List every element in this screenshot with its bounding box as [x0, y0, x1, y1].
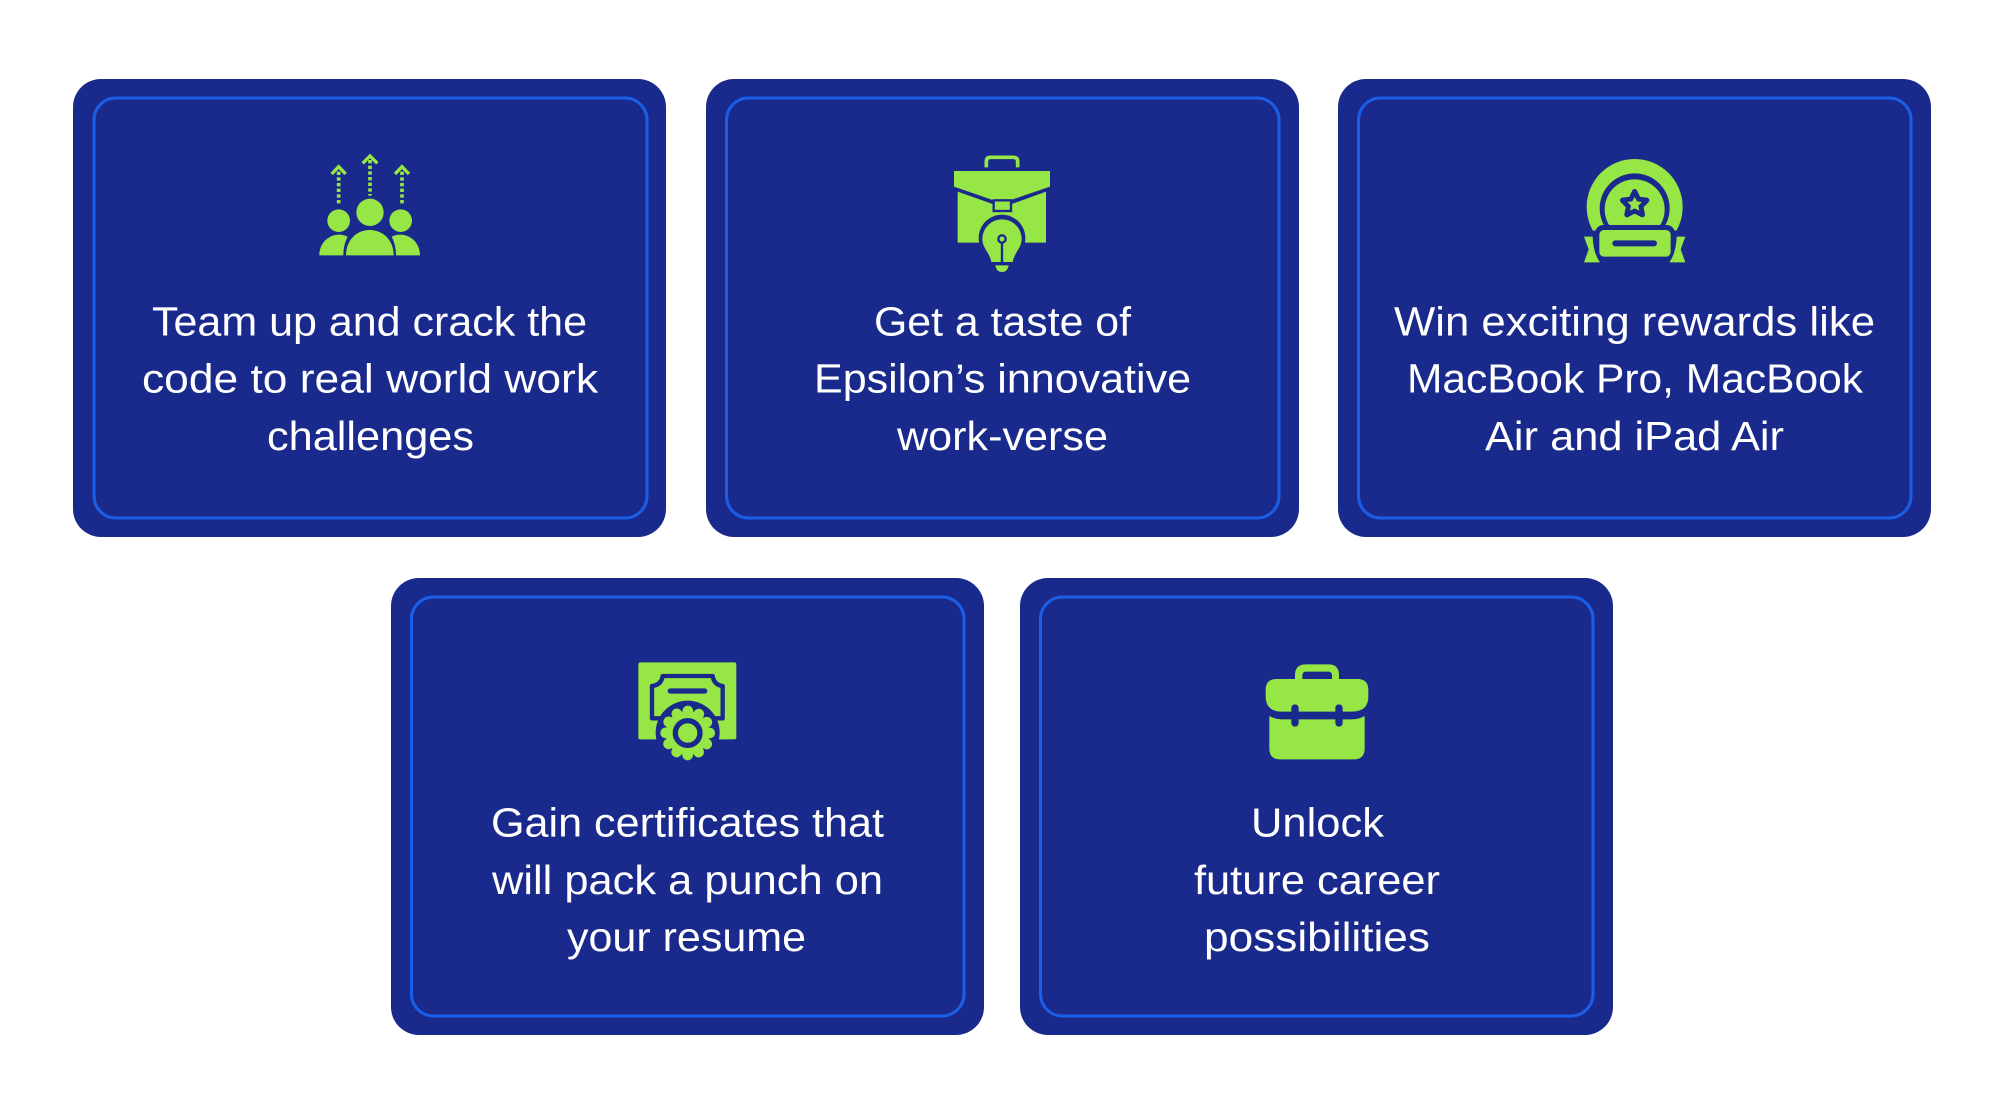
text: certificates: your resume — [567, 914, 806, 960]
icon: award badge — [1584, 159, 1685, 262]
icon: team with arrows — [319, 156, 420, 255]
icon: briefcase with bulb — [954, 157, 1050, 272]
icon: briefcase — [1266, 664, 1368, 759]
text: work-verse: Epsilon’s innovative — [814, 356, 1191, 402]
text: rewards — [1394, 298, 1875, 459]
text: certificates: Gain certificates that — [491, 800, 885, 846]
text: career: future career — [1194, 857, 1440, 903]
text: team up: code to real world work — [142, 356, 599, 402]
icon: certificate with seal — [638, 662, 736, 765]
panel: rewards — [1338, 79, 1931, 537]
text: career: Unlock — [1251, 800, 1385, 846]
text: certificates — [491, 800, 885, 960]
panel: career — [1020, 578, 1613, 1035]
text: rewards: MacBook Pro, MacBook — [1407, 356, 1864, 402]
panel: certificates — [391, 578, 984, 1035]
text: career — [1194, 800, 1440, 960]
text: certificates: will pack a punch on — [491, 857, 883, 903]
text: team up: Team up and crack the — [152, 298, 587, 344]
panel: work-verse — [706, 79, 1299, 537]
panel: team up — [73, 79, 666, 537]
text: work-verse: Get a taste of — [874, 298, 1132, 344]
text: work-verse: work-verse — [896, 413, 1108, 459]
text: work-verse — [814, 298, 1191, 459]
text: rewards: Air and iPad Air — [1485, 413, 1784, 459]
text: career: possibilities — [1204, 914, 1430, 960]
text: team up: challenges — [267, 413, 474, 459]
text: rewards: Win exciting rewards like — [1394, 298, 1875, 344]
text: team up — [142, 298, 599, 459]
